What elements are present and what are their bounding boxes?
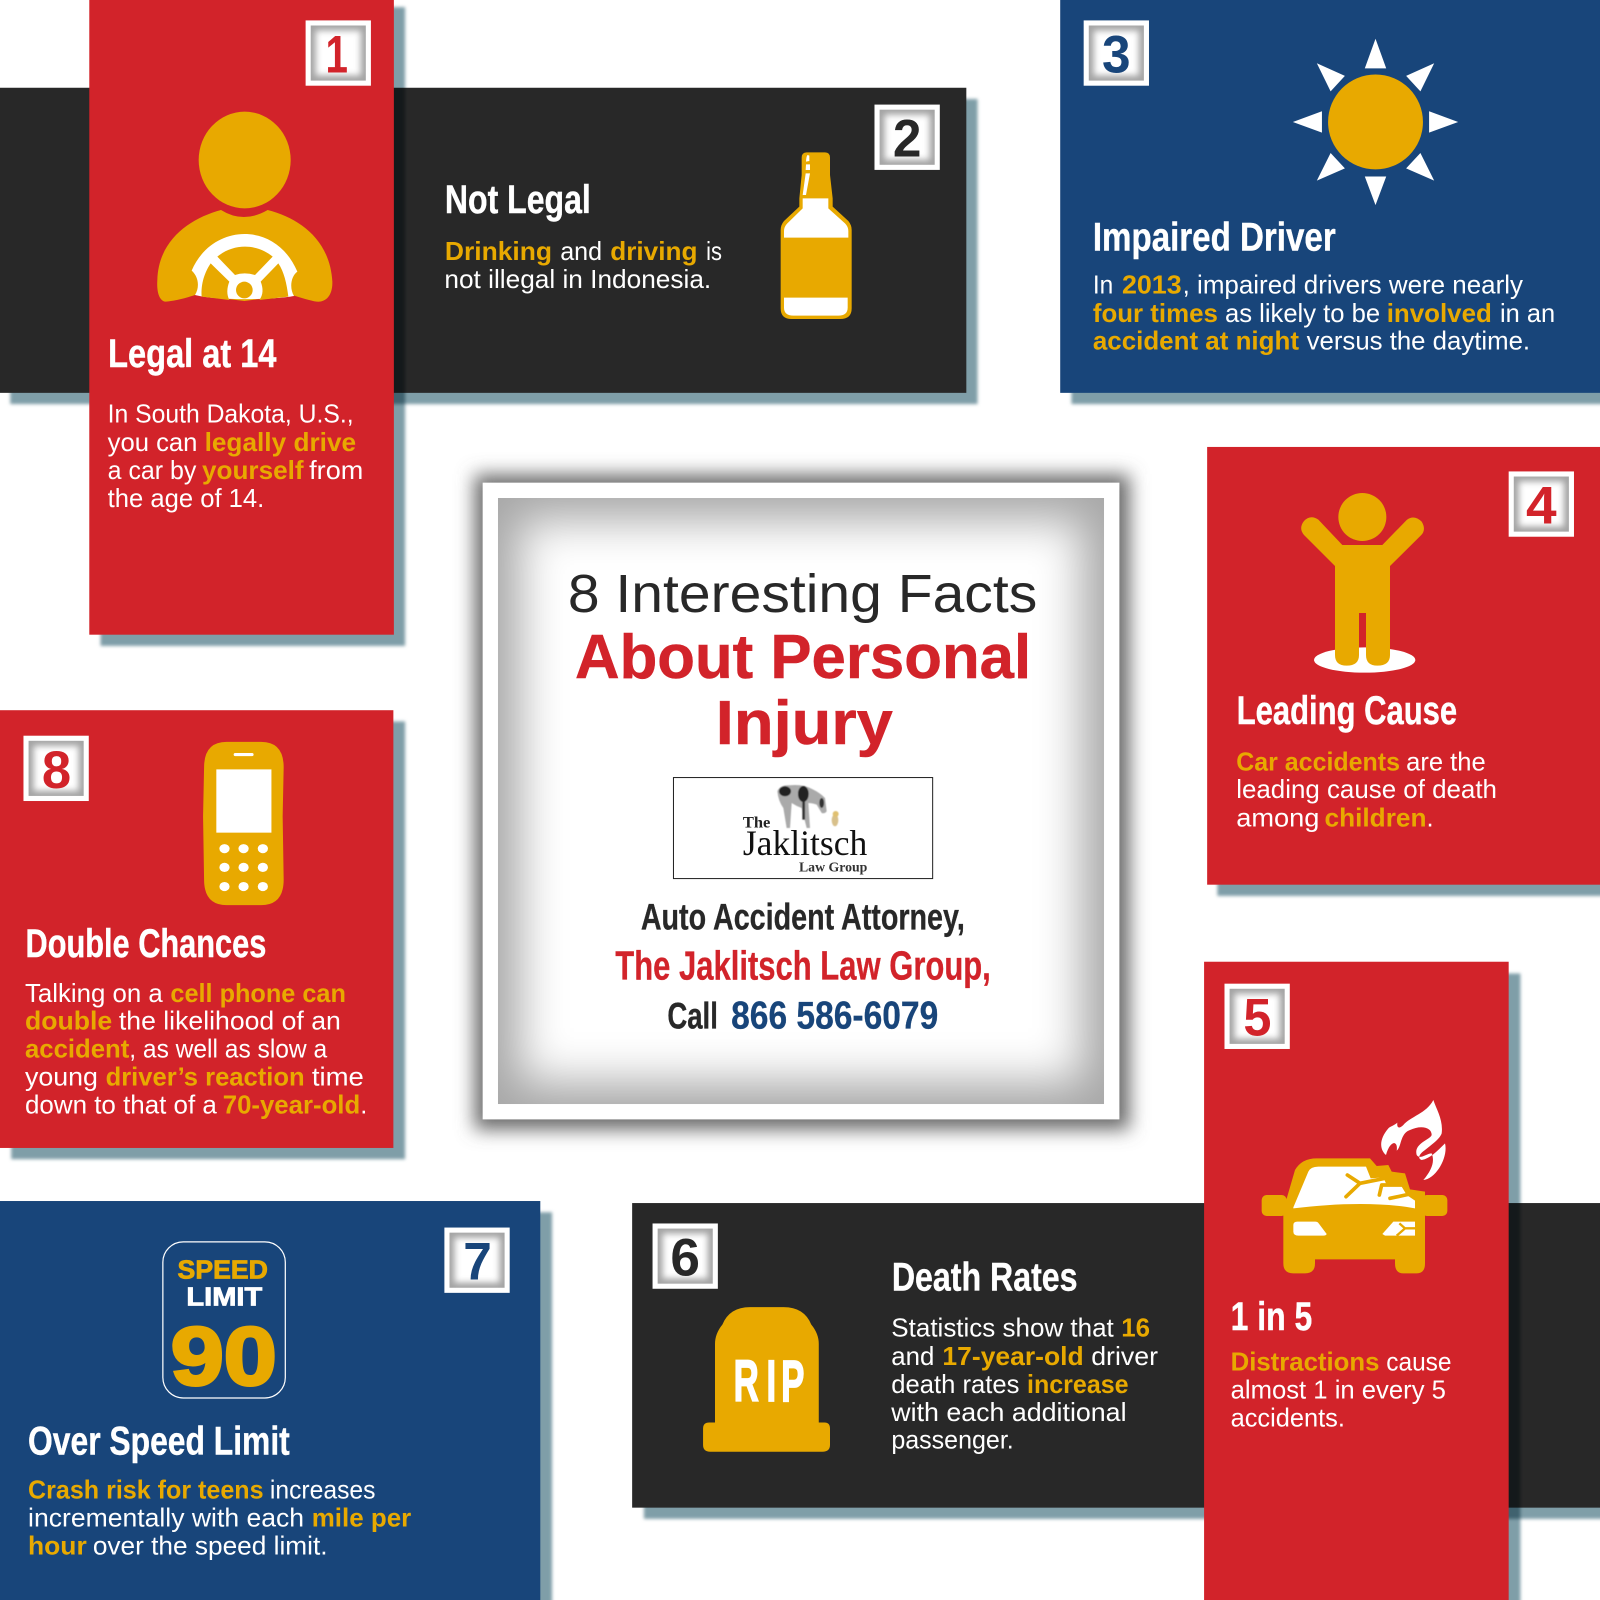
title: Injury bbox=[716, 689, 893, 758]
panel 7: over speed limit bbox=[0, 1201, 552, 1600]
text block: not legal: driving bbox=[610, 238, 697, 266]
text block: contact details: 866 586-6079 bbox=[731, 995, 938, 1038]
text block: impaired driver: in an bbox=[1500, 300, 1555, 328]
text block: impaired driver: accident at night bbox=[1093, 327, 1299, 355]
number badge 7: 7 bbox=[463, 1233, 492, 1292]
number badge 5 bbox=[1224, 984, 1290, 1049]
text block: over speed limit: hour bbox=[28, 1533, 87, 1561]
text block: legal at 14 bbox=[108, 400, 363, 513]
panel: center title card bbox=[474, 474, 1130, 1130]
icon: speed limit sign bbox=[163, 1242, 285, 1403]
text block: legal at 14: you can bbox=[108, 429, 197, 457]
text block: death rates bbox=[890, 1315, 1158, 1454]
text block: 1 in 5: almost 1 in every 5 bbox=[1231, 1376, 1446, 1404]
text block: over speed limit: Crash risk for teens bbox=[28, 1476, 264, 1504]
text block: not legal: not illegal in Indonesia. bbox=[444, 266, 711, 294]
icon: speed limit sign: 90 bbox=[171, 1310, 277, 1403]
text block: double chances: , as well as slow a bbox=[129, 1036, 328, 1064]
text block: double chances: down to that of a bbox=[25, 1091, 218, 1119]
text block: impaired driver: In bbox=[1093, 271, 1113, 299]
text block: impaired driver bbox=[1093, 271, 1555, 355]
text block: double chances: Talking on a bbox=[25, 980, 164, 1008]
text block: impaired driver: as likely to be bbox=[1225, 300, 1380, 328]
logo: The Jaklitsch Law Group: Jaklitsch bbox=[743, 823, 867, 863]
logo: The Jaklitsch Law Group: Law Group bbox=[799, 859, 867, 874]
panel 5: 1 in 5 bbox=[1204, 962, 1520, 1600]
heading: not legal: Not Legal bbox=[445, 178, 591, 222]
text block: 1 in 5: cause bbox=[1386, 1348, 1452, 1376]
icon: driver with steering wheel bbox=[157, 112, 332, 302]
panel 8: double chances bbox=[0, 710, 405, 1159]
text block: not legal bbox=[444, 238, 722, 294]
number badge 1: 1 bbox=[326, 25, 348, 84]
text block: double chances: . bbox=[360, 1091, 367, 1119]
text block: leading cause: are the bbox=[1406, 748, 1486, 776]
text block: leading cause bbox=[1236, 748, 1497, 833]
number badge 3: 3 bbox=[1102, 25, 1131, 84]
icon: crashed car on fire bbox=[1262, 1100, 1447, 1273]
text block: death rates: passenger. bbox=[891, 1426, 1014, 1454]
icon: bottle bbox=[781, 152, 852, 319]
text block: death rates: with each additional bbox=[890, 1399, 1127, 1427]
text block: over speed limit: mile per bbox=[312, 1505, 411, 1533]
text block: double chances: 70-year-old bbox=[223, 1091, 360, 1119]
icon: sun bbox=[1293, 39, 1458, 205]
number badge 2: 2 bbox=[893, 110, 921, 169]
icon: speed limit sign: LIMIT bbox=[186, 1284, 263, 1312]
text block: death rates: 17-year-old bbox=[942, 1343, 1084, 1371]
panel 2: not legal band bbox=[0, 88, 978, 404]
number badge 7 bbox=[444, 1228, 510, 1293]
number badge 4: 4 bbox=[1526, 476, 1557, 535]
number badge 4 bbox=[1509, 471, 1574, 537]
text block: impaired driver: 2013 bbox=[1122, 271, 1182, 299]
number badge 2 bbox=[874, 105, 940, 170]
title: 8 Interesting Facts bbox=[568, 564, 1037, 624]
text block: double chances: cell phone can bbox=[170, 980, 346, 1008]
text block: double chances: time bbox=[312, 1064, 364, 1092]
number badge 1 bbox=[306, 20, 371, 86]
number badge 8 bbox=[23, 736, 89, 801]
heading: legal at 14: Legal at 14 bbox=[108, 332, 277, 376]
number badge 3 bbox=[1084, 20, 1149, 86]
text block: death rates: Statistics show that bbox=[891, 1315, 1114, 1343]
heading: leading cause: Leading Cause bbox=[1237, 689, 1457, 733]
text block: double chances: double bbox=[25, 1008, 112, 1036]
text block: legal at 14: yourself bbox=[202, 457, 304, 485]
panel 1: legal at 14 bbox=[89, 0, 405, 646]
text block: leading cause: leading cause of death bbox=[1236, 776, 1497, 804]
panel 4: leading cause bbox=[1207, 447, 1600, 896]
text block: leading cause: children bbox=[1324, 805, 1427, 833]
text block: double chances: driver’s reaction bbox=[106, 1064, 305, 1092]
text block: double chances bbox=[25, 980, 367, 1119]
text block: not legal: and bbox=[560, 238, 602, 266]
text block: over speed limit: increases bbox=[270, 1476, 376, 1504]
number badge 6 bbox=[653, 1223, 718, 1289]
text block: impaired driver: four times bbox=[1093, 300, 1218, 328]
logo: The Jaklitsch Law Group bbox=[673, 778, 933, 879]
text block: legal at 14: from bbox=[309, 457, 363, 485]
icon: tombstone bbox=[703, 1307, 830, 1452]
text block: 1 in 5: accidents. bbox=[1231, 1405, 1345, 1433]
text block: not legal: Drinking bbox=[445, 238, 552, 266]
icon: tombstone: RIP bbox=[734, 1350, 804, 1414]
text block: contact details: The Jaklitsch Law Group, bbox=[615, 942, 991, 988]
icon: speed limit sign: SPEED bbox=[178, 1257, 268, 1285]
icon: dog and puppy bbox=[777, 785, 839, 828]
number badge 5: 5 bbox=[1243, 989, 1271, 1048]
text block: impaired driver: involved bbox=[1387, 300, 1492, 328]
text block: double chances: young bbox=[25, 1064, 98, 1092]
number badge 6: 6 bbox=[670, 1229, 700, 1288]
text block: legal at 14: the age of 14. bbox=[108, 485, 264, 513]
text block: death rates: death rates bbox=[891, 1371, 1019, 1399]
title bbox=[568, 564, 1037, 758]
text block: death rates: driver bbox=[1091, 1343, 1158, 1371]
text block: 1 in 5 bbox=[1231, 1348, 1452, 1433]
heading: 1 in 5: 1 in 5 bbox=[1231, 1295, 1312, 1339]
text block: legal at 14: legally drive bbox=[205, 429, 356, 457]
logo: The Jaklitsch Law Group: The bbox=[743, 815, 771, 832]
icon: cell phone bbox=[203, 742, 284, 905]
text block: contact details bbox=[615, 896, 991, 1038]
heading: impaired driver: Impaired Driver bbox=[1093, 216, 1336, 260]
number badge 8: 8 bbox=[42, 741, 71, 800]
heading: over speed limit: Over Speed Limit bbox=[28, 1420, 290, 1464]
text block: leading cause: among bbox=[1236, 805, 1319, 833]
panel 6: death rates band bbox=[632, 1203, 1600, 1519]
text block: contact details: Auto Accident Attorney, bbox=[641, 896, 965, 937]
text block: death rates: and bbox=[891, 1343, 934, 1371]
text block: legal at 14: In South Dakota, U.S., bbox=[108, 400, 354, 428]
heading: death rates: Death Rates bbox=[892, 1255, 1078, 1299]
heading: double chances: Double Chances bbox=[26, 922, 266, 966]
text block: double chances: accident bbox=[25, 1036, 130, 1064]
text block: 1 in 5: Distractions bbox=[1231, 1348, 1379, 1376]
text block: contact details: Call bbox=[667, 996, 718, 1037]
text block: death rates: 16 bbox=[1121, 1315, 1150, 1343]
text block: impaired driver: versus the daytime. bbox=[1307, 327, 1530, 355]
text block: over speed limit: over the speed limit. bbox=[93, 1533, 328, 1561]
text block: legal at 14: a car by bbox=[108, 457, 197, 485]
text block: over speed limit bbox=[28, 1476, 411, 1561]
text block: impaired driver: , impaired drivers were nearly bbox=[1183, 271, 1523, 299]
panel 3: impaired driver bbox=[1060, 0, 1600, 404]
text block: double chances: the likelihood of an bbox=[119, 1008, 341, 1036]
text block: over speed limit: incrementally with each bbox=[28, 1505, 304, 1533]
text block: leading cause: Car accidents bbox=[1236, 748, 1400, 776]
text block: death rates: increase bbox=[1027, 1371, 1129, 1399]
text block: leading cause: . bbox=[1427, 805, 1434, 833]
icon: child bbox=[1301, 493, 1424, 673]
title: About Personal bbox=[575, 623, 1031, 692]
text block: not legal: is bbox=[706, 238, 722, 266]
